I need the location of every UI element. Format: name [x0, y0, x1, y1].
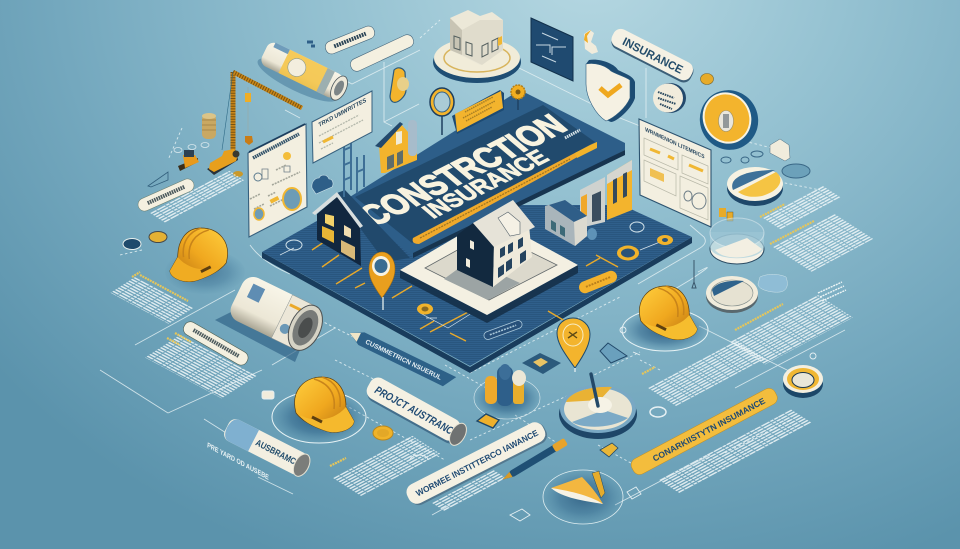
large roll with shadow: [215, 273, 329, 362]
plate: [400, 217, 578, 315]
dial needle: [591, 374, 598, 406]
text block five: [432, 470, 506, 511]
dial: [559, 374, 637, 439]
helmet right: [622, 286, 708, 351]
jib lattice: [233, 72, 302, 108]
pill two: [348, 33, 416, 73]
left small discs: [123, 232, 167, 250]
lens disc: [710, 218, 764, 264]
pill one: [323, 24, 377, 56]
pill near roll: [181, 319, 250, 367]
top pills: [307, 24, 416, 73]
dark house left: [312, 190, 410, 266]
pin on platform: [369, 252, 395, 310]
small squares: [719, 208, 733, 221]
yellow pill label: CONARKIISTYTN INSUMANCE: [651, 395, 767, 464]
plate side: [400, 265, 578, 323]
house windows: [466, 237, 526, 278]
jib: [233, 72, 302, 108]
blue sign: [531, 18, 573, 81]
board note: [565, 130, 580, 138]
yellow heading strokes: [132, 204, 814, 466]
project label: PROJCT AUSTRANC: [372, 384, 456, 438]
hook weight: [245, 136, 253, 145]
stay line: [222, 72, 233, 150]
helmet left: [165, 228, 245, 294]
text block one: [150, 171, 245, 223]
pencil label: CUSMMETRICN NSUERUL: [364, 339, 443, 382]
title: construction: CONSTRCTION: [351, 109, 575, 232]
windows: [322, 214, 355, 260]
project pill: [362, 374, 470, 449]
pill tick: [307, 42, 315, 46]
document right heading: WRNMENION LITEMRICS: [645, 127, 705, 161]
oval badge: [653, 83, 686, 113]
mast lattice: [230, 72, 236, 152]
house light wall: [493, 225, 532, 287]
dormer: [498, 212, 520, 236]
text blocks: [110, 171, 873, 511]
document two heading: TRKD UMWRITTES: [318, 97, 367, 129]
roof sweep: [337, 190, 410, 262]
center plate with house: [400, 200, 578, 323]
pencil bottom: [500, 438, 568, 483]
right label block: [818, 282, 846, 301]
small roll pill: [221, 416, 313, 479]
text block six: [659, 410, 812, 494]
document two: [312, 91, 372, 163]
white pill label: WORMEE INSTITTERCO IAWANCE: [414, 428, 540, 498]
document right: [639, 119, 711, 227]
left pill: [136, 177, 196, 213]
gold coin: [373, 426, 393, 440]
hook icon: [692, 260, 696, 288]
gray and yellow buildings: [545, 160, 632, 246]
faint small icons: [262, 327, 816, 521]
small bulldozer: [178, 150, 199, 171]
gear pin: [511, 85, 525, 110]
platform ring markers: [286, 222, 673, 314]
document right panels: [644, 138, 708, 220]
yellow house: [375, 120, 417, 173]
silo: [408, 120, 417, 156]
caption under roll: PRE YARD OD AUSEBE: [207, 442, 269, 482]
pencil top: [347, 327, 456, 390]
rolled plan top: [253, 39, 351, 111]
house dark wall: [457, 223, 494, 287]
title board: [345, 90, 625, 258]
document left gauge: [283, 188, 301, 210]
text block nine: [763, 186, 840, 229]
roof edge: [312, 192, 363, 228]
hook block: [245, 93, 251, 102]
roll label: AUSBRAMC: [254, 438, 298, 467]
check mark: [600, 85, 621, 95]
platform thin routes: [280, 240, 665, 328]
tower gray: [580, 177, 605, 228]
platform side: [262, 237, 692, 373]
board face: [355, 105, 595, 243]
subtitle lettering: [420, 159, 570, 238]
house roof: [473, 200, 535, 247]
white pill bottom: [403, 419, 550, 509]
small gold coin: [233, 171, 243, 177]
document left: [248, 124, 307, 237]
document left title: [253, 134, 299, 158]
wall: [317, 197, 361, 266]
figures trio: [474, 364, 540, 419]
text block three: [145, 335, 257, 398]
document left icons: [283, 152, 291, 160]
board backing: [345, 90, 625, 258]
yellow sign: [452, 90, 504, 134]
fold icon: [543, 470, 623, 524]
large yellow disc: [690, 81, 768, 159]
crane: [207, 72, 302, 175]
coin stack: [202, 113, 216, 139]
ring disc: [706, 276, 758, 313]
text block ten: [773, 214, 873, 272]
pie disc: [727, 167, 783, 206]
small cloud icon: [312, 175, 333, 194]
small round icon: [650, 407, 666, 417]
pill label: INSURANCE: [620, 36, 685, 77]
shield: [586, 60, 635, 122]
crane truck: [207, 149, 240, 175]
dashed connector lines: [120, 20, 820, 468]
platform yellow tag: [577, 269, 619, 295]
tower yellow: [607, 160, 632, 220]
document left header bar: [249, 124, 305, 152]
insurance pill: [608, 26, 697, 85]
yellow pin: [557, 318, 590, 372]
text block two: [110, 277, 193, 324]
board edge strip: [413, 150, 625, 258]
title: insurance: INSURANCE: [416, 145, 555, 223]
steps: [444, 260, 520, 300]
pentagon tag: [770, 139, 790, 161]
pylons: [344, 133, 364, 197]
platform routes: [312, 242, 618, 341]
small triangle icon: [600, 443, 618, 457]
small map cards: [522, 343, 627, 374]
icons left cluster: [148, 142, 209, 187]
platform: [262, 205, 692, 373]
blue blob icon: [758, 274, 787, 292]
subtitle strip: [413, 142, 597, 244]
yellow tag icon: [390, 68, 409, 102]
connector lines: [100, 47, 845, 515]
small icon: [584, 30, 598, 54]
text block four: [333, 436, 440, 496]
yellow pill: [629, 386, 780, 477]
subtitle end tab: [575, 142, 597, 158]
low house: [545, 200, 587, 246]
platform blue tag: [483, 319, 523, 341]
plate inner: [425, 232, 557, 300]
helmet middle: [272, 377, 366, 443]
small ring icons: [721, 151, 810, 178]
hook line: [247, 87, 249, 136]
small coin: [700, 74, 714, 84]
ring right: [783, 365, 823, 398]
magnifier badge: [430, 88, 454, 135]
building on disc: [433, 10, 521, 83]
text block seven: [648, 341, 764, 406]
small yellow tag: [477, 414, 499, 428]
text block eight: [730, 295, 853, 364]
mast: [230, 72, 236, 152]
platform surface: [262, 205, 692, 366]
